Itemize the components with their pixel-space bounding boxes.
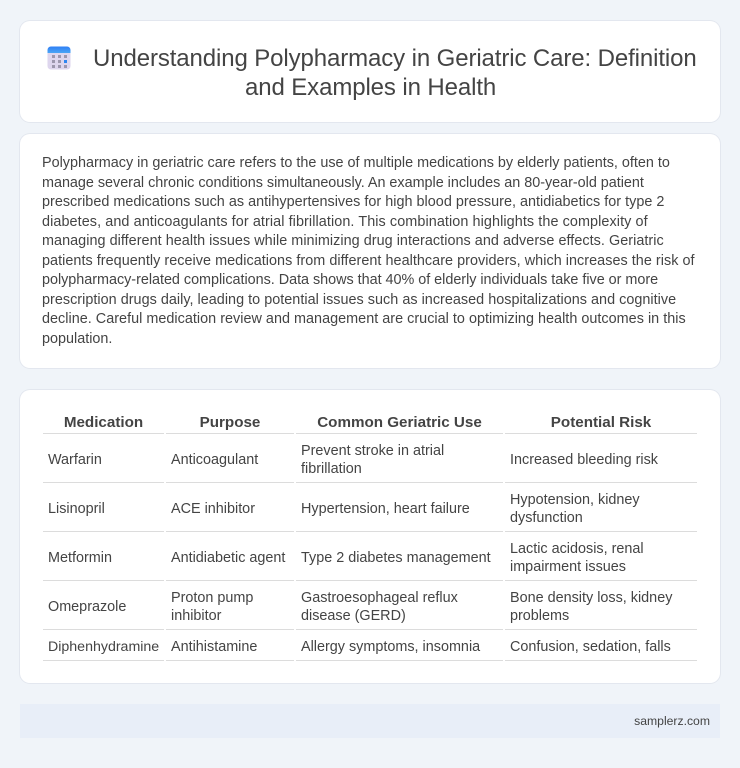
table header (64, 414, 652, 431)
row: Warfarin (48, 443, 658, 477)
row: Metformin: Type 2 diabetes management (301, 550, 491, 566)
title card (20, 21, 720, 122)
row: Lisinopril: Hypotension, kidney (510, 492, 640, 508)
row: Warfarin: Prevent stroke in atrial (301, 443, 444, 459)
row: Warfarin: Anticoagulant (171, 452, 258, 468)
icon: calendar grid (48, 46, 70, 70)
row: Omeprazole (48, 590, 672, 624)
table header: Medication (64, 414, 143, 431)
table header: Purpose (200, 414, 260, 431)
row: Metformin: Lactic acidosis, renal (510, 541, 644, 557)
description text: prescription drugs daily, leading to potential issues such as increased hospitalizations and cognitive (42, 292, 676, 308)
description text: population. (42, 330, 112, 346)
description text: patients frequently receive medications from different healthcare providers, which increases the risk of (42, 252, 695, 268)
row: Lisinopril: Hypertension, heart failure (301, 501, 470, 517)
panel: description (20, 134, 720, 368)
row: Lisinopril: ACE inhibitor (171, 501, 255, 517)
heading: and Examples in Health (245, 74, 496, 101)
row: Diphenhydramine (48, 639, 671, 655)
row: Omeprazole: disease (GERD) (301, 608, 406, 624)
row: Omeprazole: Proton pump (171, 590, 253, 606)
row: Omeprazole: problems (510, 608, 569, 624)
description text: polypharmacy-related complications. Data shows that 40% of elderly individuals take five or more (42, 272, 658, 288)
description text: decline. Careful medication review and management are crucial to optimizing health outcomes in this (42, 311, 686, 327)
table rules (43, 433, 697, 661)
footer credit: samplerz.com (634, 714, 710, 728)
row: Warfarin: Increased bleeding risk (510, 452, 658, 468)
row: Lisinopril (48, 492, 640, 526)
row: Lisinopril: dysfunction (510, 510, 583, 526)
row: Metformin: Antidiabetic agent (171, 550, 285, 566)
row: Omeprazole: Omeprazole (48, 599, 126, 615)
row: Omeprazole: Gastroesophageal reflux (301, 590, 458, 606)
description text: diabetes, and anticoagulants for atrial fibrillation. This combination highlights the complexity of (42, 214, 648, 230)
row: Diphenhydramine: Diphenhydramine (48, 639, 159, 655)
row: Omeprazole: inhibitor (171, 608, 221, 624)
row: Metformin: Metformin (48, 550, 112, 566)
row: Diphenhydramine: Antihistamine (171, 639, 257, 655)
description text: managing different health issues while minimizing drug interactions and adverse effects. Geriatric (42, 233, 664, 249)
row: Warfarin: fibrillation (301, 461, 362, 477)
table header: Common Geriatric Use (317, 414, 482, 431)
row: Metformin: impairment issues (510, 559, 626, 575)
row: Omeprazole: Bone density loss, kidney (510, 590, 672, 606)
table header: Potential Risk (551, 414, 651, 431)
row: Metformin (48, 541, 644, 575)
footer (20, 704, 720, 738)
panel: medication table (20, 390, 720, 683)
description text: prescribed medications such as antihypertensives for high blood pressure, antidiabetics for type 2 (42, 194, 664, 210)
heading (93, 45, 697, 101)
description text: manage several chronic conditions simultaneously. An example includes an 80-year-old patient (42, 174, 644, 190)
row: Warfarin: Warfarin (48, 452, 102, 468)
description text: Polypharmacy in geriatric care refers to the use of multiple medications by elderly patients, often to (42, 155, 670, 171)
heading: Understanding Polypharmacy in Geriatric Care: Definition (93, 45, 697, 72)
row: Lisinopril: Lisinopril (48, 501, 105, 517)
row: Diphenhydramine: Confusion, sedation, falls (510, 639, 671, 655)
row: Diphenhydramine: Allergy symptoms, insomnia (301, 639, 480, 655)
description text (42, 155, 695, 346)
